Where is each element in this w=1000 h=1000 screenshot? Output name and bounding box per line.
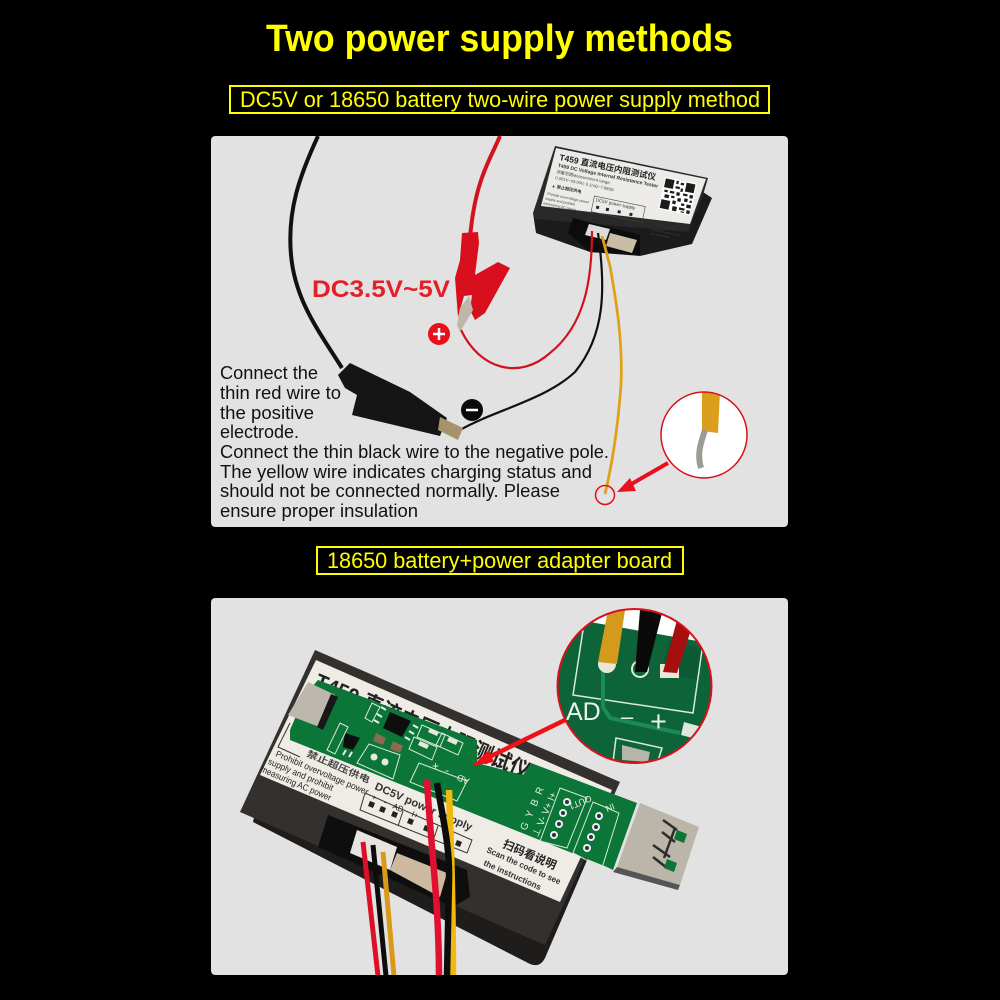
instructions text: electrode. xyxy=(220,422,299,442)
device: T459 tester: 测量范围Measurement range: xyxy=(556,168,612,186)
device: T459 tester: T459 DC Voltage Internal Resistance Tester xyxy=(557,163,659,190)
device: T459 tester body: AD xyxy=(391,802,405,814)
device: T459 tester: 扫码看说明 xyxy=(657,223,677,231)
USB-A connector xyxy=(613,803,699,890)
pin labels: ⊥ V- V+ I+ xyxy=(531,791,560,839)
inset: wire tip magnified xyxy=(661,392,747,478)
device: T459 tester body: 禁止超压供电 xyxy=(305,748,372,785)
device: T459 tester: DC5V power supply xyxy=(595,197,637,211)
panel: two-wire power supply xyxy=(211,136,788,527)
board: green adapter PCB: + xyxy=(432,759,439,773)
inset: solder pads magnified xyxy=(556,608,712,764)
device: T459 tester body: + xyxy=(370,793,378,803)
device: T459 tester body: supply and prohibit xyxy=(267,756,335,793)
device: T459 tester: Prohibit overvoltage power xyxy=(547,192,590,205)
clip: black alligator xyxy=(338,363,463,440)
wires: right group xyxy=(427,780,453,976)
wire: thin black xyxy=(460,233,602,430)
wires: left group xyxy=(363,842,394,976)
device: T459 tester body: T459 直流电压内阻测试仪 xyxy=(311,669,534,784)
device: T459 tester body: 扫码看说明 xyxy=(501,837,559,872)
device: T459 tester: Scan the code to see xyxy=(651,227,680,237)
chips and traces xyxy=(383,712,411,737)
instructions text: the positive xyxy=(220,403,314,423)
device: T459 tester body: I+ xyxy=(410,810,420,821)
wire: thin yellow xyxy=(602,236,621,494)
instructions text: should not be connected normally. Please xyxy=(220,481,560,501)
device: T459 tester body xyxy=(240,650,620,965)
device: T459 tester body: the instructions xyxy=(482,858,543,892)
small circle: wire tip xyxy=(596,486,614,504)
device: T459 tester: the instructions xyxy=(651,231,672,240)
device: T459 tester body: Scan the code to see xyxy=(485,845,563,886)
board: green adapter PCB: AD xyxy=(455,772,471,786)
icon: minus xyxy=(461,399,483,421)
wire: thick black probe lead xyxy=(290,136,342,368)
board: green adapter PCB: IN xyxy=(604,801,616,814)
instructions text xyxy=(220,363,609,521)
panel: adapter board xyxy=(211,598,788,976)
instructions text: ensure proper insulation xyxy=(220,501,418,521)
device: T459 tester: measuring AC power xyxy=(543,201,577,212)
device: T459 tester xyxy=(533,146,712,256)
QR code xyxy=(658,177,697,215)
label: voltage: DC3.5V~5V xyxy=(312,276,450,303)
heading: adapter board: 18650 battery+power adapter board xyxy=(327,548,672,573)
heading: two-wire method: DC5V or 18650 battery two-wire power supply method xyxy=(240,87,760,112)
device: T459 tester: 0.001V~43.00V; 0.1mΩ~7.999Ω xyxy=(555,175,614,192)
icon: plus xyxy=(428,323,450,345)
instructions text: thin red wire to xyxy=(220,383,341,403)
device: T459 tester: T459 直流电压内阻测试仪 xyxy=(559,152,657,182)
inset: solder pads magnified: – xyxy=(621,704,634,729)
clip: red alligator xyxy=(455,232,510,332)
arrow: tip to inset xyxy=(617,463,668,492)
board: green adapter PCB: OUT1 xyxy=(567,793,593,812)
pin labels xyxy=(520,787,555,837)
instructions text: Connect the xyxy=(220,363,318,383)
USB-C connector xyxy=(288,682,335,728)
wire: thin red xyxy=(461,231,592,368)
instructions text: The yellow wire indicates charging status and xyxy=(220,462,592,482)
title: Two power supply methods xyxy=(266,18,733,60)
inset: solder pads magnified: AD xyxy=(566,698,601,726)
board: green adapter PCB xyxy=(288,680,637,870)
pin labels: G Y B R xyxy=(519,786,547,832)
device: T459 tester: supply and prohibit xyxy=(545,197,575,207)
device: T459 tester body: DC5V power supply xyxy=(373,781,475,834)
wire: thick red probe lead xyxy=(470,136,500,238)
instructions text: Connect the thin black wire to the negative pole. xyxy=(220,442,609,462)
device: T459 tester body: measuring AC power xyxy=(259,764,333,803)
inset: solder pads magnified: + xyxy=(650,706,667,738)
device: T459 tester: ▲ 禁止超压供电 xyxy=(551,182,583,195)
arrow: board to inset xyxy=(472,720,565,766)
device: T459 tester body: - xyxy=(382,798,389,807)
board: green adapter PCB: - xyxy=(445,763,449,777)
device: T459 tester body: Prohibit overvoltage power xyxy=(274,749,370,797)
